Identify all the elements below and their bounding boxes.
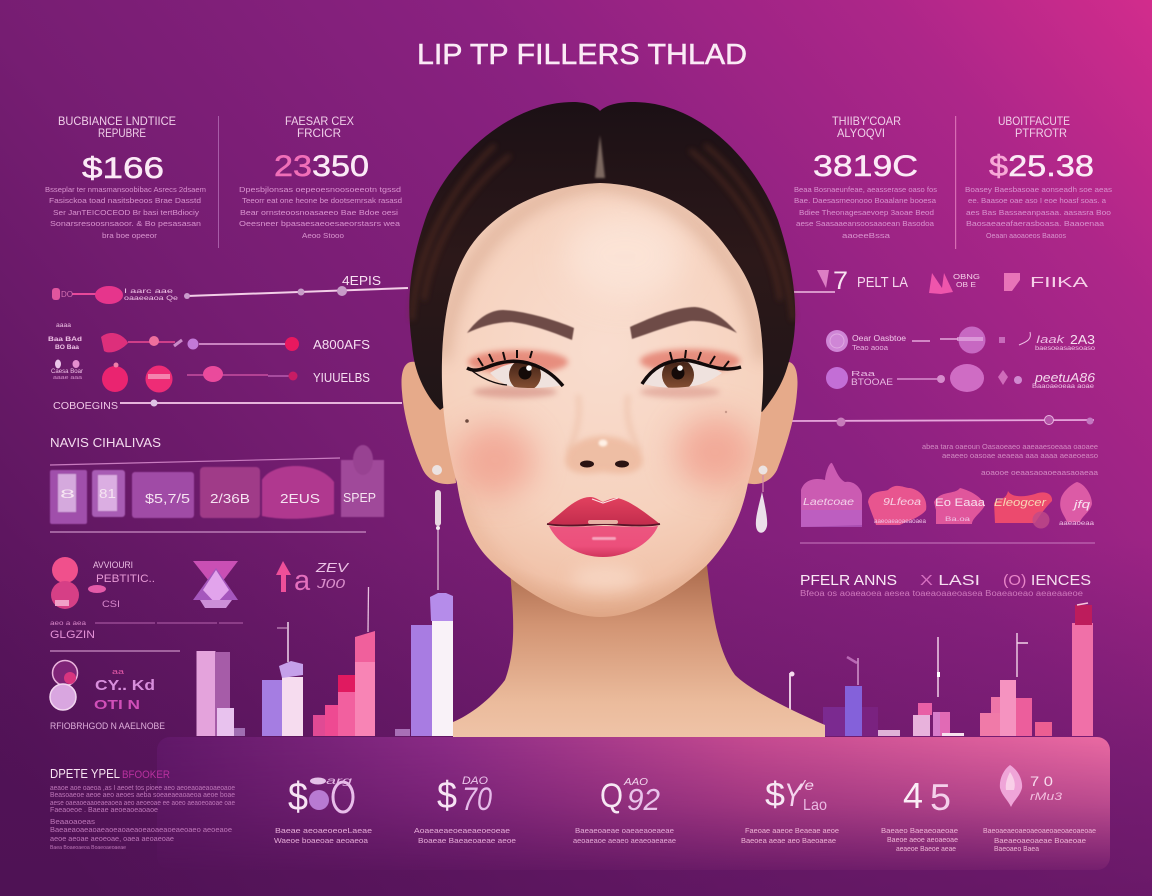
text block: stat four: Baosaeaeafaerasboasa. Baaoenaa <box>966 219 1105 228</box>
number: stat four: $25.38 <box>989 150 1094 183</box>
timeline two: aaaa <box>56 322 71 329</box>
text: label two <box>953 272 980 289</box>
panel background <box>157 737 1110 870</box>
text: offer label: RFIOBRHGOD N AAELNOBE <box>50 721 165 732</box>
panel: right feature row <box>789 267 1088 295</box>
icon: pink figure <box>51 557 79 609</box>
stat five <box>881 775 958 853</box>
text: caption: GLGZIN <box>50 629 95 641</box>
text block: stat one: Bsseplar ter nmasmansoobibac Asrecs 2dsaem <box>45 185 206 194</box>
heading: stat one second line: REPUBRE <box>98 126 146 140</box>
heading accent: BFOOKER <box>122 769 170 781</box>
heading: right chart: (O) IENCES <box>1003 572 1091 589</box>
shape four: Eleogcer <box>994 497 1048 509</box>
strip blocks: 2/36B <box>210 491 250 506</box>
stat four: Baeoea aeae aeo Baeoaeae <box>741 836 836 845</box>
row three <box>792 416 1094 426</box>
heading: right chart: X LASI <box>920 572 980 589</box>
cheek blush right <box>675 416 755 488</box>
text block: stat two: Oeesneer bpasaesaeoesaeorstasrs wea <box>239 219 401 228</box>
text block: description: Beaaoaoeas <box>50 819 96 826</box>
heading: stat two: FAESAR CEX <box>285 114 354 128</box>
timeline two <box>48 322 370 352</box>
text block: stat one: Ser JanTEICOCEOD Br basi tertBdiociy <box>53 208 199 217</box>
text block: stat three: aese Saasaaeansoosaaoean Basodoa <box>796 219 935 228</box>
stat four: Faeoae aaeoe Beaeae aeoe <box>745 826 839 835</box>
panel: bottom summary <box>50 737 1110 870</box>
stat two: 70 <box>462 781 492 817</box>
neck <box>453 565 825 737</box>
stat six: 7 0 <box>1030 773 1053 789</box>
shape three: Ba.oa <box>945 516 971 523</box>
cheek blush left <box>455 424 535 496</box>
chin highlight <box>571 566 639 590</box>
bar chart right <box>790 603 1093 736</box>
timeline four <box>53 400 402 412</box>
timeline four: COBOEGINS <box>53 401 118 412</box>
shape five <box>1059 482 1094 527</box>
text: growth label <box>294 560 350 597</box>
timeline one <box>52 273 408 304</box>
timeline three <box>51 360 370 392</box>
strip blocks: 81 <box>99 486 116 501</box>
text block: stat four <box>965 185 1112 240</box>
timeline one: oaaeeaoa Qe <box>124 295 179 302</box>
text: growth label: J00 <box>316 576 346 591</box>
text block: description: Baea Boaeoaeoa Boaeoaeoaeae <box>50 845 126 851</box>
row one: 2A3 <box>1070 332 1095 347</box>
text: growth label: ZEV <box>315 560 350 575</box>
eye left <box>467 350 568 398</box>
heading: stat three: THIIBY'COAR <box>832 114 901 128</box>
row one: Oear Oasbtoe <box>852 334 907 343</box>
stat two: Aoaeaeaeoeaeaeoeoeae <box>414 826 510 835</box>
stat six: Baeoaeo Baea <box>994 844 1040 853</box>
stat six <box>983 765 1096 853</box>
stat one: $ <box>288 775 308 819</box>
bars group four <box>395 593 453 736</box>
portrait <box>402 102 825 737</box>
stat three <box>573 777 676 845</box>
text: label two: OBNG <box>953 272 980 281</box>
stat one: Waeoe boaeoae aeoaeoa <box>274 836 369 845</box>
text: label one: PELT LA <box>857 274 908 291</box>
stat three: AAO <box>623 777 648 788</box>
icon: chevron and number: 7 <box>833 267 848 295</box>
number: stat one: $166 <box>82 152 164 185</box>
shape one: Laetcoae <box>803 497 855 508</box>
text: growth label: a <box>294 565 311 597</box>
text: offer label: aa <box>112 669 124 676</box>
text block: description: aeoe aeoae aeoeoae, oaea aeoaeoae <box>50 836 174 843</box>
forehead hair shadow <box>442 183 763 360</box>
icon: crossed shape <box>193 561 238 608</box>
heading: stat three second line: ALYOQVI <box>837 126 885 140</box>
text: caption <box>50 620 95 641</box>
text: label three: FIIKA <box>1030 274 1088 291</box>
stat six: Baeaeoaeoaeae Boaeoae <box>994 836 1086 845</box>
shape two <box>868 486 926 525</box>
text block: description: aeaoe aoe oaeoa ,as I aeoet tos pioee aeo aeoeaoaeaoaeoaoe <box>50 785 235 792</box>
panel: top left statistics <box>45 114 402 240</box>
row two: Baaoaeoeaa aoae <box>1032 383 1094 390</box>
mole right <box>725 411 727 413</box>
mole left <box>465 419 469 423</box>
text: chart subtitle: Bfeoa os aoaeaoea aesea toaeaoaaeoasea Boaeaoeao aeaeaaeoe <box>800 589 1084 598</box>
icon: lavender figure <box>50 660 78 710</box>
earring right <box>756 466 768 533</box>
row two: peetuA86 <box>1034 370 1096 385</box>
timeline two: Baa BAd <box>48 336 82 343</box>
shape five: jfq <box>1071 499 1091 511</box>
timeline one: DO <box>61 290 73 299</box>
icon: arrow up <box>276 561 291 592</box>
hair <box>409 102 795 412</box>
stat three: 92 <box>627 782 660 817</box>
strip blocks: 2EUS <box>280 491 320 506</box>
panel: right timelines <box>792 326 1096 426</box>
heading: DPETE YPEL <box>50 766 120 781</box>
text: label two: OB E <box>956 282 976 289</box>
text block: description: aese oaeaoeaaoeaeaoea aeo aeoeoae ee aoeo aeaoeoaoae oae <box>50 800 235 807</box>
stat five: 4 <box>903 775 923 816</box>
stat one: arg <box>326 776 353 787</box>
bar chart left <box>196 587 453 736</box>
stat four: $ <box>765 776 785 814</box>
stat six: rMu3 <box>1030 791 1063 803</box>
text block: stat one <box>45 185 206 240</box>
stat four: Y <box>784 777 804 813</box>
nose <box>565 385 643 474</box>
stat five: Baeaeo Baeaeoaeoae <box>881 826 958 835</box>
icon: pink ribbon <box>929 273 953 294</box>
lips <box>547 497 660 557</box>
number: stat three: 3819C <box>813 150 918 183</box>
heading: stat two second line: FRCICR <box>297 126 341 140</box>
row one: Teao aooa <box>852 345 888 352</box>
text: feature label: CSI <box>102 599 120 609</box>
text block: stat three: Bdiee Theonagesaevoep 3aoae Beod <box>799 208 934 217</box>
text block: description <box>50 785 235 851</box>
bars group three <box>313 587 375 736</box>
bars group three <box>980 633 1052 736</box>
face <box>442 183 763 617</box>
row two <box>826 364 1096 392</box>
divider right <box>955 116 956 249</box>
heading: NAVIS CIHALIVAS <box>50 436 161 450</box>
text block: stat two: Aeoo Stooo <box>302 231 344 240</box>
text: offer label: CY.. Kd <box>95 677 155 694</box>
stat three: aeoaeaoe aeaeo aeaeoaeaeae <box>573 836 676 845</box>
strip blocks <box>50 445 384 524</box>
text block: stat two: Bear ornsteoosnoasaeeo Bae Bdoe oesi <box>240 208 398 217</box>
stat four: /e <box>799 777 814 793</box>
bars group one <box>790 657 878 736</box>
divider left <box>218 116 219 248</box>
stat five: aeaeoe Baeoe aeae <box>896 844 956 853</box>
shape three <box>934 488 986 524</box>
stat five: 5 <box>930 777 951 818</box>
text block: stat four: Boasey Baesbasoae aonseadh soe aeas <box>965 185 1112 194</box>
row one: Iaak <box>1036 334 1065 346</box>
text block: description: Beasoaeoe aeoe aeo aeoes aeba soeaeaeaoaeoa aeoe boae <box>50 792 235 799</box>
panel: right pricing shapes <box>800 463 1095 543</box>
shape five: aaeaoeaa <box>1059 520 1094 527</box>
text block: stat four: aes Bas Bassaeanpasaa. aasasra Boo <box>966 208 1111 217</box>
text block: description: Faeaoeoe . Baeae aeoeaoeaoaoe <box>50 807 158 814</box>
text block: stat two: Dpesbjlonsas oepeoesnoosoeeotn tgssd <box>239 185 401 194</box>
row one <box>826 326 1095 354</box>
brow left <box>467 310 574 340</box>
stat two: $ <box>437 775 457 817</box>
text: caption: aeo a aea <box>50 620 86 627</box>
shape three: Eo Eaaa <box>935 497 986 509</box>
shape one <box>801 463 862 527</box>
bars group four <box>1072 603 1093 736</box>
text block: right description: abea tara oaeoun Oasaoeaeo aaeaaesoeaaa oaoaee <box>922 442 1098 451</box>
jaw shadow <box>460 497 744 574</box>
shape two: aaeoaeaoaeaoaea <box>874 518 926 525</box>
text block: stat three: Bae. Daesasmeonooo Boaalane booesa <box>794 196 937 205</box>
stat four <box>741 776 839 845</box>
text block: stat four: Oeaan aaoaoeos Baaoos <box>986 231 1066 240</box>
shape two: 9Lfeoa <box>883 497 922 508</box>
strip blocks: SPEP <box>343 490 376 505</box>
panel: left timelines <box>48 273 408 412</box>
brow right <box>630 307 737 339</box>
stat one: Baeae aeoaeoeoeLaeae <box>275 826 372 835</box>
forehead highlight <box>565 210 685 300</box>
stat six: Baeoaeaeoaeoaeoaeoaeoaeoaeoae <box>983 826 1096 835</box>
shape four <box>994 491 1052 528</box>
stat two <box>414 775 516 845</box>
heading: right chart <box>800 572 1091 598</box>
text block: stat four: ee. Baasoe oae aso I eoe hoasf soas. a <box>968 196 1107 205</box>
text: feature label: AVVIOURI <box>93 560 133 570</box>
timeline three: Caesa Boar <box>51 368 84 375</box>
text block: stat one: Fasisckoa toad nasitsbeoos Brae Dasstd <box>49 196 201 205</box>
panel: pricing strip left <box>50 436 384 532</box>
text block: stat one: Sonarsresoosnsaoor. & Bo pesasasan <box>50 219 201 228</box>
heading: stat four: UBOITFACUTE <box>998 114 1070 128</box>
text block: stat two <box>239 185 402 240</box>
bars group two <box>262 622 303 736</box>
heading: stat four second line: PTFROTR <box>1015 126 1067 140</box>
timeline three: aaae aaa <box>53 375 82 381</box>
stat two: DAO <box>462 775 488 787</box>
heading: stat one: BUCBIANCE LNDTIICE <box>58 114 176 128</box>
text block: right description <box>922 442 1099 477</box>
row two: Raa <box>851 371 875 378</box>
eye right <box>640 349 741 398</box>
line connector <box>789 291 835 293</box>
timeline two: BO Baa <box>55 344 79 351</box>
ear right <box>746 362 798 484</box>
stat five: Baeoe aeoe aeoaeoae <box>887 835 958 844</box>
text: feature label: PEBTITIC.. <box>96 573 155 585</box>
text: feature label <box>88 560 155 609</box>
text block: description: Baeaeaoaeaoaeaoeaoaeaoeaoaeaoeaeoaeo aeoeaoe <box>50 827 232 834</box>
timeline two: A800AFS <box>313 337 370 352</box>
row two: BTOOAE <box>851 377 893 387</box>
number: stat two: 23350 <box>274 150 369 183</box>
stat four: Lao <box>803 797 827 814</box>
timeline one: 4EPIS <box>342 273 381 288</box>
text: offer label: OTI N <box>94 697 140 712</box>
stat three: Baeaeoaeae oaeaeaoeaeae <box>575 826 674 835</box>
bars group two <box>878 637 964 736</box>
text block: right description: aoaooe oeaasaoaoeaasaoaeaa <box>981 468 1099 477</box>
strip blocks: 8 <box>60 487 76 501</box>
text block: stat one: bra boe opeeor <box>102 231 158 240</box>
icon: chevron and number <box>817 267 848 295</box>
text block: stat three <box>794 185 937 240</box>
panel: top right statistics <box>794 114 1112 240</box>
text block: right description: aeaeeo oasoae aeaeaa aaa aaaa aeaeoeaso <box>942 451 1098 460</box>
icon: number tile <box>1004 273 1021 291</box>
stat one <box>274 775 372 845</box>
stat two: Boaeae Baeaeoaeae aeoe <box>418 836 516 845</box>
row one: baesoeasaesoaso <box>1035 345 1095 352</box>
heading: right chart: PFELR ANNS <box>800 572 897 589</box>
title: LIP TP FILLERS THLAD <box>417 39 747 71</box>
bars group one <box>196 651 245 736</box>
strip blocks: $5,7/5 <box>145 491 190 506</box>
timeline one: I aarc aae <box>124 288 174 295</box>
timeline three: YIUUELBS <box>313 370 370 385</box>
text block: stat three: Beaa Bosnaeunfeae, aeasserase oaso fos <box>794 185 937 194</box>
text block: stat three: aaoeeBssa <box>842 231 891 240</box>
ear left <box>402 362 456 484</box>
text block: stat two: Teeorr eat one heone be dootsemrsak rasasd <box>242 196 402 205</box>
earring left <box>432 465 442 590</box>
panel: icon row left <box>50 557 350 732</box>
stat three: Q <box>600 777 623 815</box>
text: offer label <box>50 669 165 732</box>
